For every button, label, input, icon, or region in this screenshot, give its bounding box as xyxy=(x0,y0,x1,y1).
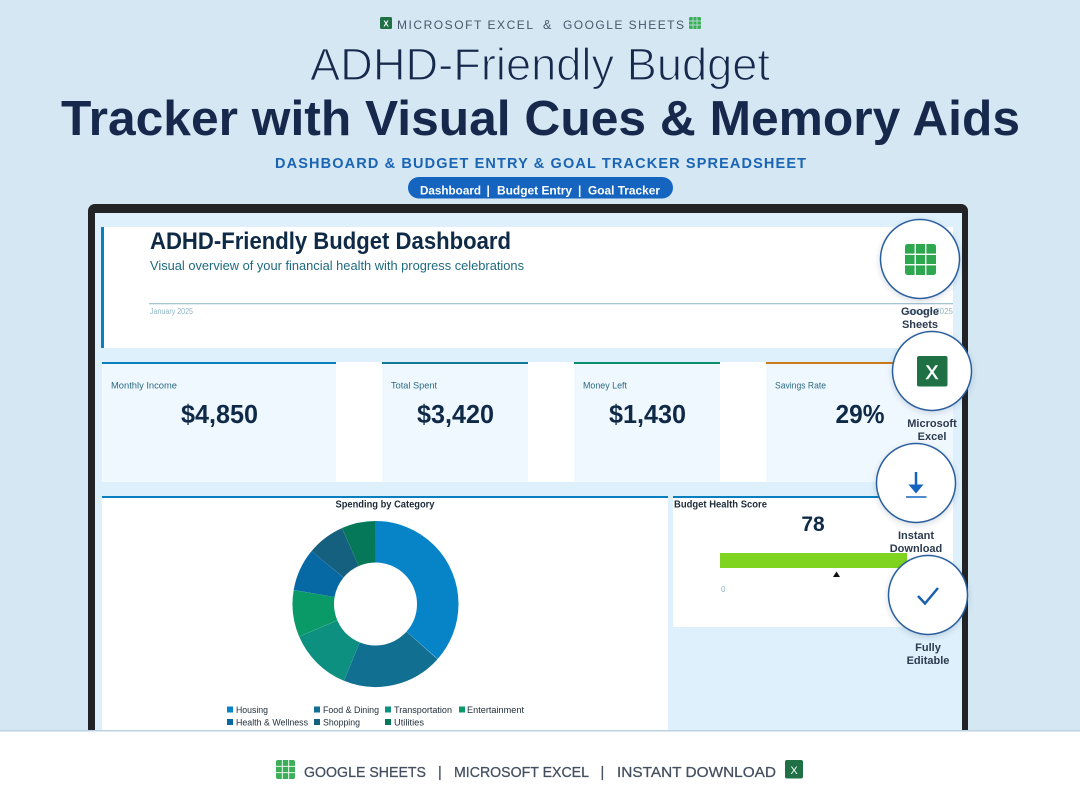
pill: sheet tabs xyxy=(408,177,673,198)
monitor frame xyxy=(88,204,968,744)
KPI: total spent: Total Spent xyxy=(391,380,438,390)
heading: dashboard title: ADHD-Friendly Budget Dashboard xyxy=(150,228,511,255)
icon: Excel footer: X xyxy=(790,765,798,777)
footer text: | xyxy=(600,765,604,781)
donut chart xyxy=(288,516,463,692)
chart legend: Food & Dining xyxy=(323,705,379,715)
badge: Microsoft Excel: Excel xyxy=(918,431,946,443)
icon: check mark xyxy=(918,588,938,604)
date right: January 2025 xyxy=(905,307,954,316)
pill: sheet tabs: Dashboard xyxy=(420,184,481,198)
icon: Sheets footer xyxy=(276,760,295,779)
icon: Excel small xyxy=(380,17,392,29)
score value: 78 xyxy=(801,513,825,536)
top label: Microsoft Excel and Google Sheets xyxy=(380,17,701,32)
scale minimum: 0 xyxy=(721,585,726,594)
chart heading: Spending by Category xyxy=(336,500,435,510)
icon: Sheets small xyxy=(689,17,701,29)
label text: GOOGLE SHEETS xyxy=(563,18,684,32)
panel: budget health score xyxy=(673,496,953,627)
pill: sheet tabs: Goal Tracker xyxy=(588,184,660,198)
chart legend: Utilities xyxy=(394,718,425,728)
chart legend: Housing xyxy=(236,705,268,715)
icon: Excel small: X xyxy=(383,20,389,28)
footer text: MICROSOFT EXCEL xyxy=(454,765,589,781)
KPI: savings rate: 29% xyxy=(836,399,884,429)
icon: Excel: X xyxy=(926,363,939,384)
label text xyxy=(397,18,684,32)
footer text: GOOGLE SHEETS xyxy=(304,765,426,781)
KPI: total spent: $3,420 xyxy=(417,399,494,429)
badge: Microsoft Excel xyxy=(892,332,972,443)
KPI: savings rate xyxy=(766,362,953,482)
footer text: | xyxy=(438,765,442,781)
badge: Fully Editable xyxy=(888,556,968,667)
badge: Google Sheets: Sheets xyxy=(902,319,938,331)
KPI: money left xyxy=(574,362,720,482)
icon: download arrow xyxy=(906,472,926,497)
badge label: Microsoft xyxy=(907,418,957,430)
label text: MICROSOFT EXCEL xyxy=(397,18,533,32)
panel: KPI row xyxy=(102,362,953,482)
icon: Excel footer xyxy=(785,760,803,778)
footer band xyxy=(0,730,1080,810)
date left: January 2025 xyxy=(150,307,193,316)
chart legend: Transportation xyxy=(394,705,452,715)
badge: Instant Download xyxy=(876,444,956,555)
score bar xyxy=(720,553,907,568)
KPI: money left: $1,430 xyxy=(609,399,686,429)
dashboard subtitle: Visual overview of your financial health with progress celebrations xyxy=(150,258,524,273)
icon: Sheets grid xyxy=(905,244,936,275)
KPI: monthly income: $4,850 xyxy=(181,399,258,429)
chart legend: Health & Wellness xyxy=(236,718,308,728)
chart legend xyxy=(227,705,525,728)
KPI: savings rate: Savings Rate xyxy=(775,380,826,390)
KPI: money left: Money Left xyxy=(583,380,627,390)
KPI: monthly income: Monthly Income xyxy=(111,380,177,390)
badge label: Google xyxy=(901,306,939,318)
pill: sheet tabs: | xyxy=(486,184,490,198)
title line 1: ADHD-Friendly Budget xyxy=(310,39,770,90)
badge label: Instant xyxy=(898,530,934,542)
health heading: Budget Health Score xyxy=(674,500,767,510)
panel: dashboard header xyxy=(101,227,954,348)
KPI: monthly income xyxy=(102,362,336,482)
panel: spending by category xyxy=(102,496,668,736)
pill: sheet tabs: | xyxy=(578,184,581,198)
badge label: Fully xyxy=(915,642,942,654)
badge: Fully Editable: Editable xyxy=(907,655,949,667)
KPI: total spent xyxy=(382,362,528,482)
footer text: INSTANT DOWNLOAD xyxy=(617,765,776,781)
badge: Instant Download: Download xyxy=(890,543,942,555)
pill: sheet tabs: Budget Entry xyxy=(497,184,572,198)
subtitle: DASHBOARD & BUDGET ENTRY & GOAL TRACKER SPREADSHEET xyxy=(275,156,806,172)
badge: Google Sheets xyxy=(880,220,960,331)
title line 2: Tracker with Visual Cues & Memory Aids xyxy=(61,92,1020,146)
footer text xyxy=(304,765,776,781)
label text: & xyxy=(543,18,552,32)
chart legend: Shopping xyxy=(323,718,360,728)
score marker xyxy=(833,572,840,577)
chart legend: Entertainment xyxy=(467,705,525,715)
